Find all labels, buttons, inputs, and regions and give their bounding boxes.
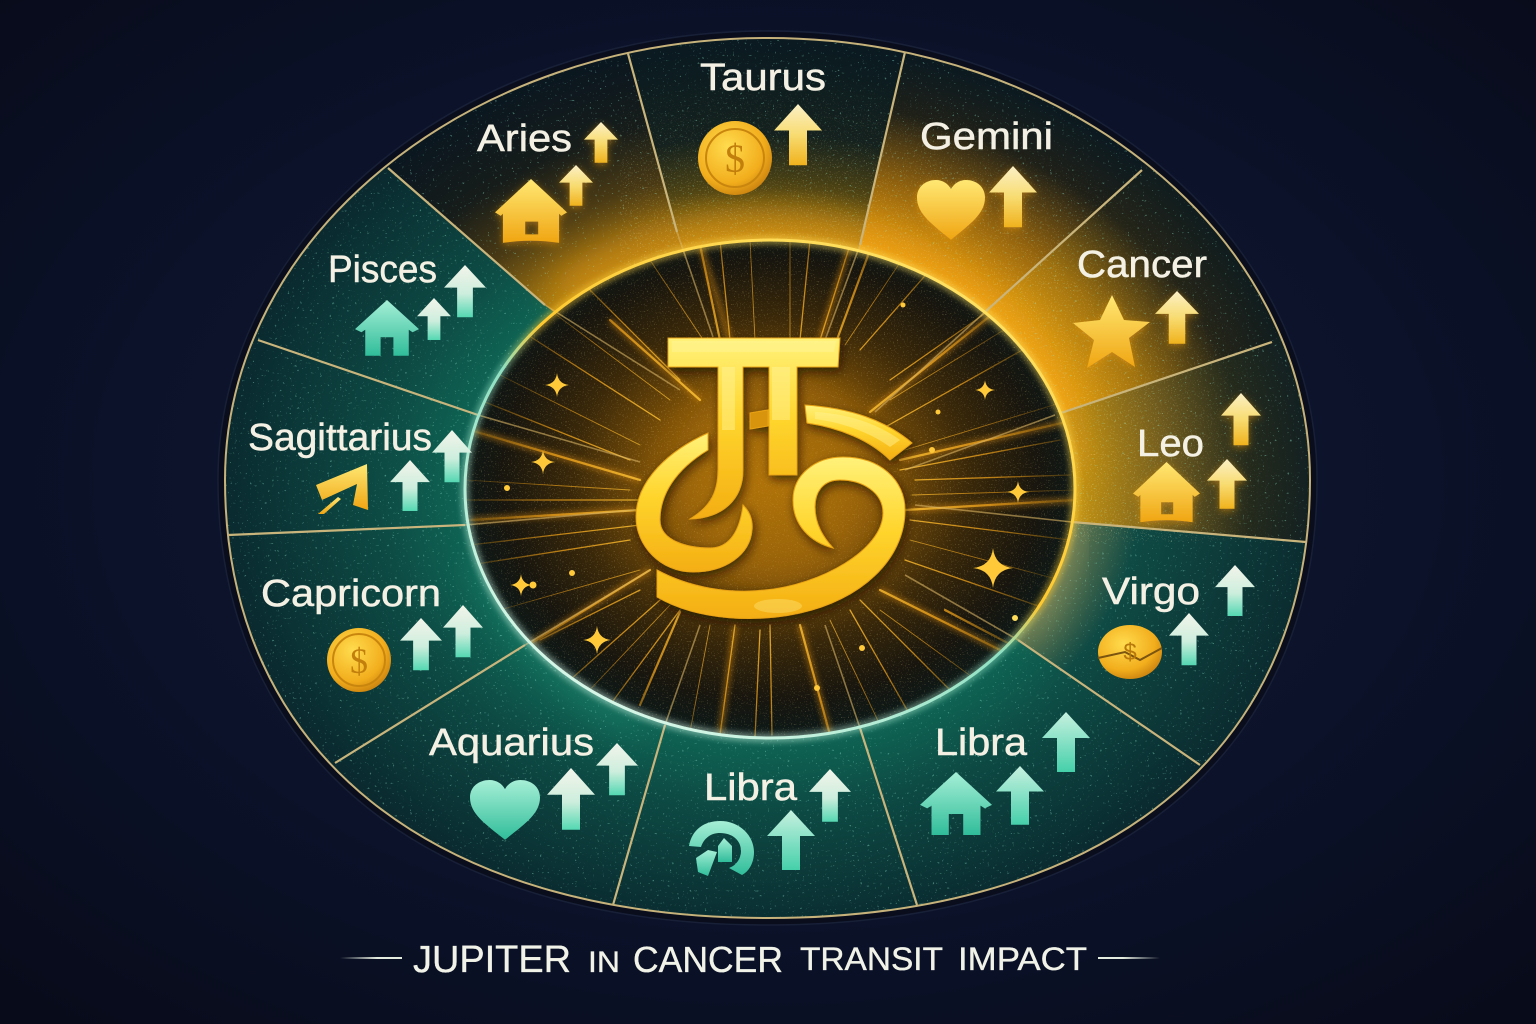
center ring stroke (465, 240, 1075, 738)
panel: Gemini (917, 116, 1053, 240)
icon: ring with house (689, 821, 754, 876)
panel: Pisces (328, 249, 486, 356)
icon: house (920, 772, 992, 835)
title: IN (588, 946, 620, 979)
icon: heart (470, 780, 540, 840)
wheel segments background (226, 39, 1309, 917)
panel: Libra (bottom) (689, 767, 851, 876)
wheel outer rim (225, 38, 1310, 918)
glyph glow (670, 375, 880, 585)
icon: coin: $ (725, 136, 745, 181)
label: Libra: Libra (704, 767, 798, 809)
label: Aries: Aries (477, 118, 572, 160)
arrow up (989, 166, 1037, 227)
label: Pisces: Pisces (328, 249, 437, 291)
icon: house (1133, 462, 1200, 522)
arrows up (1207, 393, 1261, 509)
glyph shapes (636, 338, 912, 618)
panel: Capricorn (261, 573, 483, 692)
panel: Libra (right) (920, 712, 1090, 835)
label: Sagittarius: Sagittarius (248, 417, 432, 459)
panel: Leo (1133, 393, 1261, 522)
arrow up (1155, 291, 1199, 344)
label: Cancer: Cancer (1077, 244, 1207, 286)
central Jupiter in Cancer glyph (636, 338, 912, 618)
title rule left (340, 957, 402, 959)
medallion dust (465, 240, 1075, 738)
label: Virgo: Virgo (1102, 571, 1200, 613)
arrows up (547, 743, 638, 830)
arrows up (390, 430, 472, 511)
title: IMPACT (958, 941, 1087, 977)
arrows up (996, 712, 1090, 825)
title (340, 939, 1160, 981)
arrows up (400, 605, 483, 670)
icon: star (1073, 295, 1150, 368)
title rule right (1098, 957, 1160, 959)
panel: Aries (477, 118, 618, 243)
ray glow layer (470, 245, 1075, 735)
label: Leo: Leo (1137, 423, 1204, 465)
arrows up (559, 122, 618, 206)
panel: Sagittarius (248, 417, 472, 514)
label: Aquarius: Aquarius (429, 722, 594, 764)
icon: coin: $ (1123, 639, 1137, 666)
panel: Aquarius (429, 722, 638, 840)
icon: coin: $ (350, 641, 368, 681)
label: Taurus: Taurus (700, 57, 826, 99)
wheel spokes (228, 50, 1306, 905)
icon: coin (327, 628, 391, 692)
arrows up (1169, 565, 1255, 665)
title: TRANSIT (800, 941, 943, 977)
glyph highlights (672, 341, 900, 613)
icon: coin (1098, 625, 1162, 679)
ring glow (480, 227, 1072, 725)
label: Libra: Libra (935, 722, 1028, 764)
icon: house (355, 300, 419, 356)
arrows up (417, 265, 486, 340)
title: JUPITER (413, 939, 571, 981)
arrows up (767, 769, 851, 870)
wheel outer dark band (218, 31, 1317, 925)
label: Gemini: Gemini (920, 116, 1053, 158)
panel: Virgo (1098, 565, 1255, 679)
title: CANCER (633, 939, 783, 980)
panel: Taurus (698, 57, 826, 195)
center medallion (465, 232, 1075, 738)
label: Capricorn: Capricorn (261, 573, 441, 615)
icon: arrow shard (316, 464, 368, 514)
icon: heart (917, 180, 985, 240)
icon: house (495, 179, 567, 243)
arrow up (774, 104, 822, 165)
sparkles (504, 302, 1029, 691)
light rays (465, 240, 1075, 738)
panel: Cancer (1073, 244, 1207, 368)
spoke extensions inside medallion (465, 232, 1072, 728)
